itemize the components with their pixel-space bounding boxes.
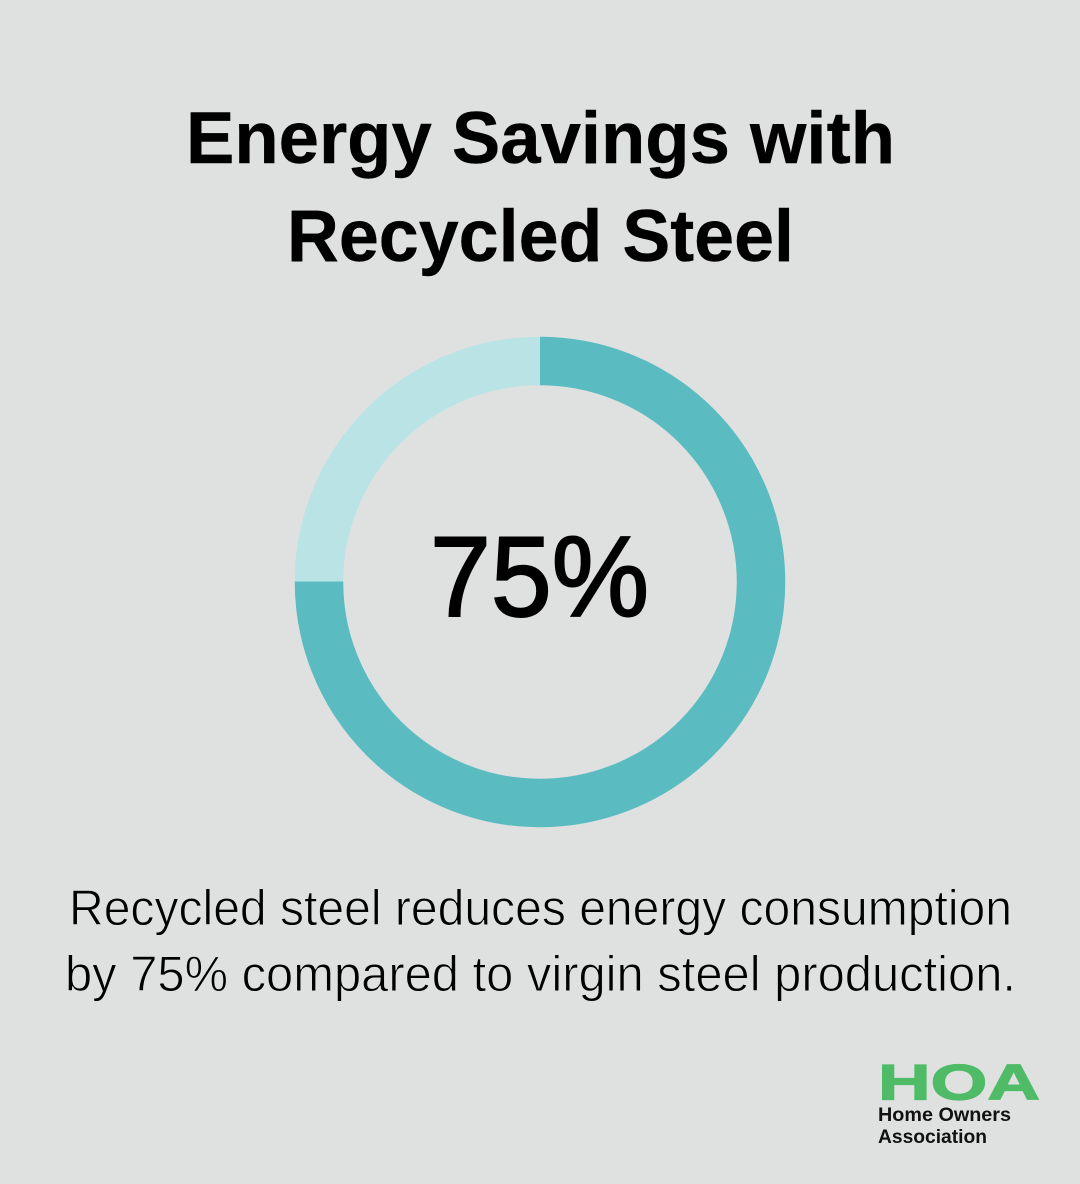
logo mark: HOA xyxy=(878,1054,1040,1110)
center value: 75% xyxy=(430,514,649,641)
donut chart: 75% xyxy=(319,361,761,803)
description text xyxy=(65,880,1016,1002)
75% arc xyxy=(319,361,761,803)
title xyxy=(186,98,895,277)
description text: by 75% compared to virgin steel production. xyxy=(65,946,1016,1002)
title: Recycled Steel xyxy=(287,196,794,277)
remaining 25% arc xyxy=(319,361,540,582)
title: Energy Savings with xyxy=(186,98,895,179)
description text: Recycled steel reduces energy consumption xyxy=(69,880,1012,936)
logo name: Home Owners xyxy=(878,1105,1011,1126)
logo name xyxy=(878,1105,1011,1148)
logo: HOA Home Owners Association xyxy=(878,1054,1040,1148)
logo name: Association xyxy=(878,1127,987,1148)
